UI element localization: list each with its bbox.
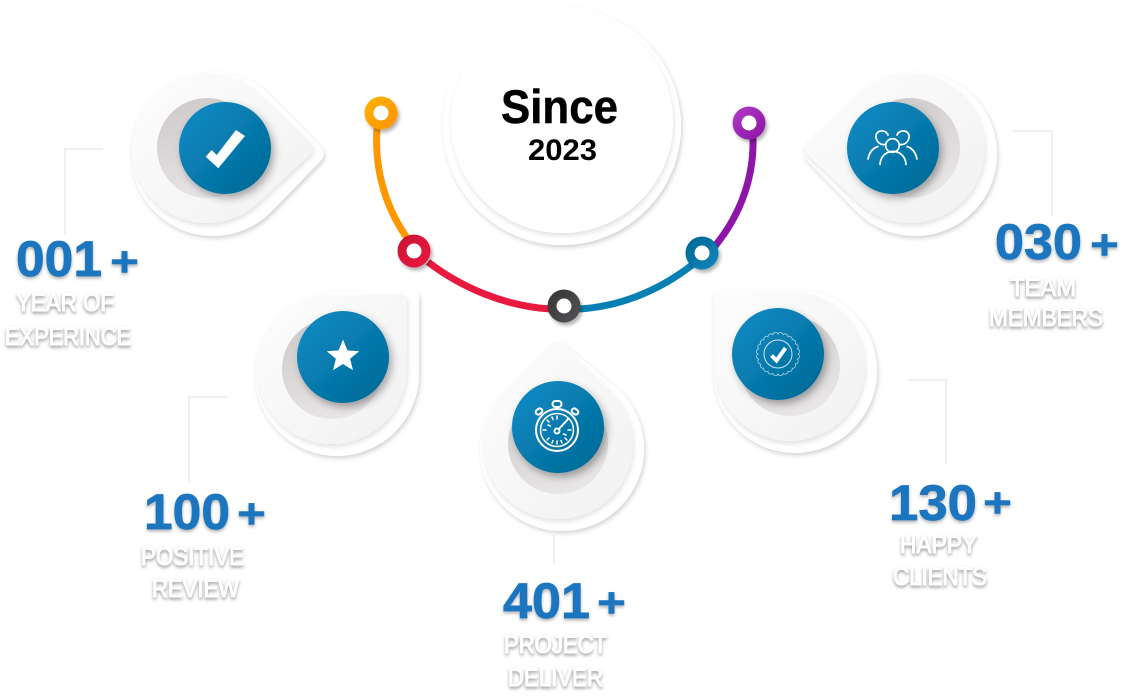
label: team members: TEAM xyxy=(1010,274,1076,302)
number: 001: 001 xyxy=(16,231,102,287)
number: 030: 030 xyxy=(995,214,1082,270)
label: happy clients: CLIENTS xyxy=(893,563,987,591)
number: 030 xyxy=(995,214,1119,270)
number: 001 xyxy=(16,231,139,287)
label: team members xyxy=(989,274,1103,332)
node: orange xyxy=(364,96,398,130)
leader line xyxy=(65,149,103,235)
label: happy clients xyxy=(893,531,987,591)
label: year of experince xyxy=(5,289,131,351)
label: positive review xyxy=(141,543,244,603)
node: red xyxy=(398,234,430,268)
label: happy clients: HAPPY xyxy=(900,531,977,559)
leader line xyxy=(189,397,227,482)
label: project deliver: DELIVER xyxy=(508,664,603,692)
icon: check mark xyxy=(206,130,245,168)
label: project deliver: PROJECT xyxy=(504,631,607,659)
number: 130 xyxy=(889,475,1012,531)
panel: team members xyxy=(804,72,1119,332)
node: dark xyxy=(548,290,580,322)
leader line xyxy=(1013,131,1052,216)
leader line xyxy=(908,380,946,464)
number: 130: 130 xyxy=(889,475,977,531)
label: project deliver xyxy=(504,631,607,692)
number: 130: + xyxy=(983,479,1012,526)
panel: project deliver xyxy=(480,342,644,692)
panel: happy clients xyxy=(713,289,1012,591)
number: 001: + xyxy=(110,238,139,285)
number: 100: + xyxy=(237,490,266,537)
label: positive review: POSITIVE xyxy=(141,543,244,571)
label: year of experince: YEAR OF xyxy=(16,289,114,317)
number: 401 xyxy=(503,573,626,629)
subheading: year: 2023 xyxy=(528,134,597,167)
label: year of experince: EXPERINCE xyxy=(5,323,131,351)
number: 100 xyxy=(144,484,266,540)
panel: positive review xyxy=(141,292,419,603)
number: 100: 100 xyxy=(144,484,230,540)
timeline arc with nodes xyxy=(364,96,766,322)
label: positive review: REVIEW xyxy=(152,575,239,603)
number: 030: + xyxy=(1090,221,1119,268)
number: 401: 401 xyxy=(503,573,590,629)
heading: since: Since xyxy=(501,80,618,133)
number: 401: + xyxy=(597,579,626,626)
label: team members: MEMBERS xyxy=(989,304,1103,332)
icon: stopwatch xyxy=(535,401,579,451)
panel: year of experience xyxy=(5,72,324,351)
icon: team xyxy=(868,131,917,164)
node: purple xyxy=(732,106,766,140)
leader line xyxy=(553,532,555,563)
center circle: since 2023 xyxy=(443,7,681,245)
node: blue xyxy=(686,236,718,270)
icon: star xyxy=(327,340,359,370)
icon: badge with check xyxy=(757,333,799,375)
